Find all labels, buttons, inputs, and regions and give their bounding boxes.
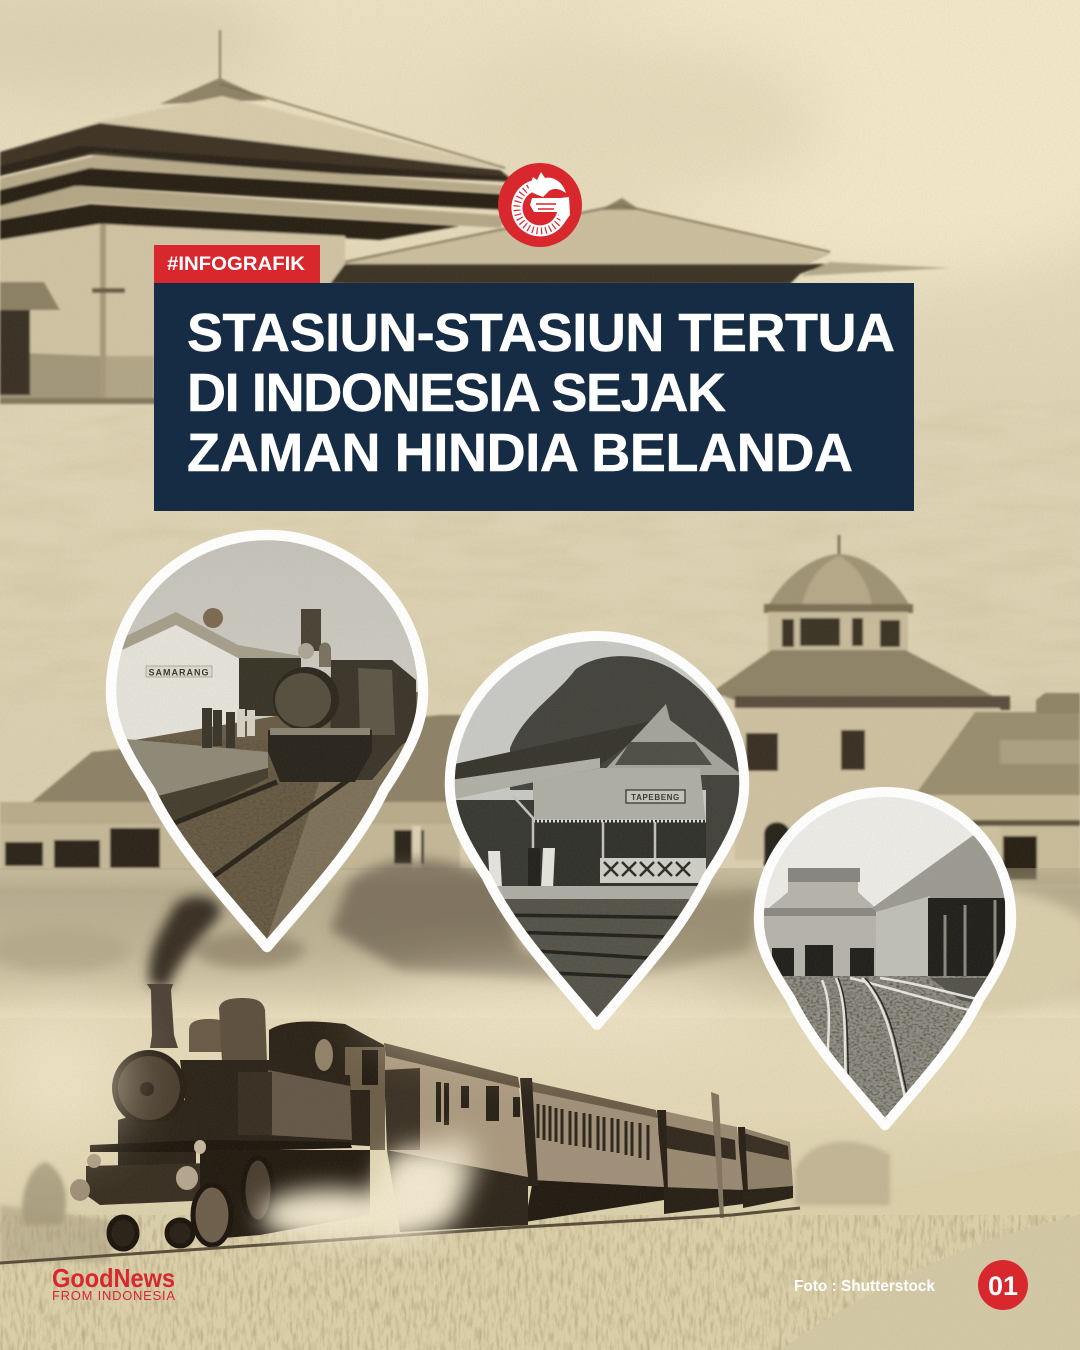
porch and door (0, 282, 60, 310)
locomotive (330, 660, 416, 780)
background photo: domed station in the middle (0, 535, 1080, 884)
background photo: old station roof at the top (0, 30, 950, 404)
front beam and machinery (70, 1140, 370, 1240)
wheels (109, 1158, 273, 1249)
grass bank (0, 1120, 1080, 1350)
station roof trim (122, 612, 300, 658)
pale steam haze over the trackside (0, 980, 750, 1140)
title: ZAMAN HINDIA BELANDA (187, 423, 853, 483)
third carriage (657, 1110, 743, 1214)
photo (754, 787, 1016, 1132)
pin outline (759, 792, 1011, 1125)
trees behind the train (0, 1141, 890, 1262)
steam locomotive train (0, 984, 800, 1263)
second roof (345, 205, 830, 268)
signal post (711, 1092, 724, 1218)
photo credit: Foto : Shutterstock (794, 1278, 935, 1295)
first carriage (384, 1043, 528, 1232)
wall (533, 768, 706, 824)
name board (146, 666, 212, 677)
GoodNews wordmark: FROM INDONESIA (52, 1288, 175, 1303)
wall (0, 224, 345, 400)
hashtag tag (154, 245, 320, 283)
rear carriage (738, 1127, 793, 1208)
GoodNews wordmark: GoodNews (52, 1263, 175, 1293)
people (488, 848, 555, 888)
second carriage (520, 1078, 664, 1222)
ground (754, 976, 1016, 1132)
roof tiers (0, 123, 515, 182)
platform and tracks (444, 886, 750, 900)
pin outline (111, 535, 423, 947)
recess (239, 658, 301, 716)
platform (126, 739, 268, 796)
shed opening (928, 898, 1005, 978)
rails (167, 733, 414, 881)
mid ground haze (0, 868, 1080, 1018)
upper roof (92, 96, 505, 168)
smoke plume (149, 896, 305, 988)
people (202, 708, 235, 748)
ring of the G (517, 186, 563, 231)
track (0, 1208, 800, 1263)
veranda (450, 800, 534, 890)
chimney (147, 984, 178, 1048)
spire (219, 30, 221, 80)
title panel (154, 283, 914, 511)
steam clouds (260, 1135, 477, 1241)
smokebox front (112, 1050, 196, 1168)
ground (135, 692, 418, 939)
bushes behind the pins (0, 859, 1080, 1015)
station wall (116, 625, 239, 740)
tree (510, 656, 742, 790)
cab (269, 1022, 385, 1150)
right wing (915, 712, 1080, 798)
G bar (530, 197, 570, 226)
drum (764, 604, 913, 613)
pin photo: Samarang station (105, 530, 429, 960)
photo: SAMARANG (148, 668, 210, 678)
title: DI INDONESIA SEJAK (187, 363, 726, 423)
name board (626, 790, 685, 803)
pin outline (450, 636, 744, 1025)
boiler body (118, 1060, 352, 1150)
pin photo: small wooden station (444, 631, 750, 1039)
main roof (450, 718, 666, 790)
logo badge (498, 163, 582, 247)
long shed roof (872, 834, 1005, 914)
front shed (764, 870, 880, 976)
tracks (822, 978, 1010, 1125)
page number badge (978, 1260, 1028, 1310)
main roof (712, 650, 1012, 706)
eagle head (528, 172, 566, 197)
pin photo: engine shed (754, 787, 1016, 1132)
left wing roof (32, 715, 470, 802)
dome (838, 535, 840, 556)
domes (189, 1019, 229, 1052)
title: STASIUN-STASIUN TERTUA (187, 303, 894, 363)
hashtag tag: #INFOGRAFIK (167, 253, 305, 275)
photo (116, 540, 418, 939)
frieze and wall (735, 696, 1010, 710)
railing (600, 858, 706, 883)
side tank (268, 1070, 352, 1140)
photo (444, 631, 750, 1039)
GoodNews wordmark (52, 1263, 175, 1303)
photo: TAPEBENG (631, 793, 680, 802)
page number badge: 01 (988, 1271, 1018, 1301)
